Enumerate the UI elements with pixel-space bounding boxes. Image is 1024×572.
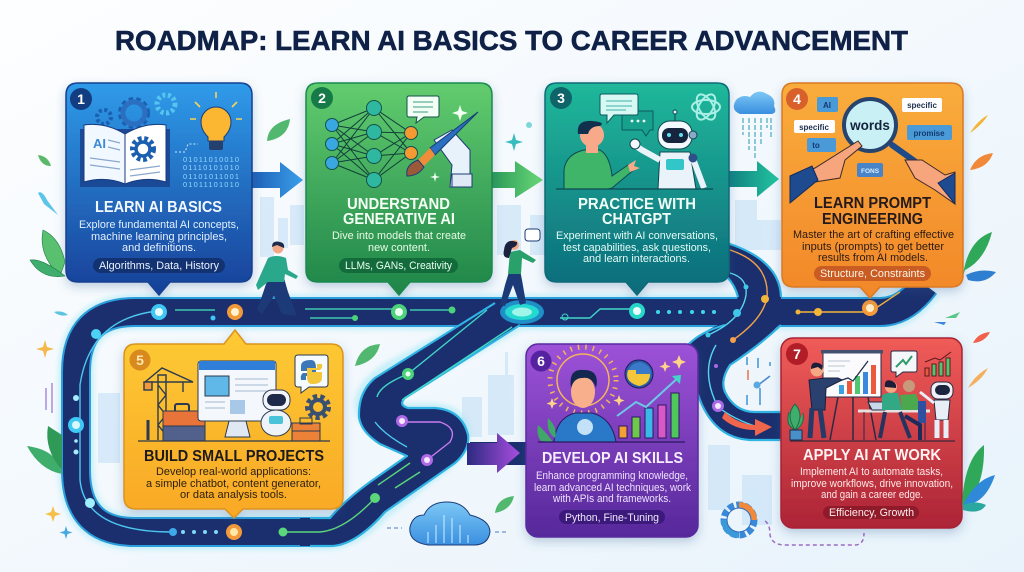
word tags: AI (823, 101, 831, 110)
icon: bottom data cloud (387, 502, 508, 545)
heading: ENGINEERING (822, 211, 923, 228)
badge 6 (530, 350, 552, 372)
icon: gear (308, 397, 328, 417)
heading: CHATGPT (602, 211, 671, 228)
arrow: step 2 to 3 (492, 161, 543, 198)
keyword pill: Python, Fine-Tuning (565, 512, 659, 524)
icon: robot hand with brush (407, 105, 478, 187)
badge 5: 5 (136, 352, 144, 368)
winding section of road (688, 243, 785, 440)
heading (814, 195, 931, 228)
icon: monitor (198, 361, 276, 437)
description: and gain a career edge. (821, 489, 923, 501)
heading: GENERATIVE AI (343, 211, 455, 228)
word tags (794, 97, 952, 177)
description (556, 230, 718, 265)
dashed connector to step 7 (765, 521, 864, 545)
description: results from AI models. (818, 252, 928, 264)
icon: light bulb (190, 92, 242, 150)
keyword pill: LLMs, GANs, Creativity (345, 260, 452, 272)
description: Explore fundamental AI concepts, (79, 219, 239, 231)
heading: UNDERSTAND (347, 196, 450, 213)
heading: DEVELOP AI SKILLS (542, 450, 683, 467)
decorative sparkles (36, 122, 532, 539)
panel: step 2 understand generative AI (306, 83, 492, 295)
red direction arrow on road (722, 412, 772, 436)
description: improve workflows, drive innovation, (791, 478, 953, 490)
binary digits: 01011010010 (183, 155, 239, 164)
icon: person (564, 121, 640, 189)
badge 4 (786, 88, 808, 110)
panel: step 7 apply AI at work (781, 338, 962, 528)
badge 2 (311, 87, 333, 109)
arrow: step 3 to 4 (729, 161, 779, 197)
title: ROADMAP: LEARN AI BASICS TO CAREER ADVANCEMENT (115, 25, 908, 56)
keyword pill: Efficiency, Growth (829, 507, 914, 519)
icon: robot (261, 390, 291, 436)
heading: BUILD SMALL PROJECTS (144, 448, 324, 465)
walking woman (500, 229, 540, 306)
description (534, 470, 691, 505)
badge 7 (786, 343, 808, 365)
description (332, 230, 466, 254)
icon: python bubble (295, 355, 328, 393)
icon: person with glowing halo (537, 347, 616, 442)
icon: team at table (858, 380, 930, 440)
description: machine learning principles, (91, 231, 227, 243)
description: or data analysis tools. (180, 489, 287, 501)
icon: mini bar chart (925, 352, 951, 376)
description: Dive into models that create (332, 230, 466, 242)
road nodes (68, 284, 878, 540)
word tags: FONS (861, 168, 880, 175)
heading (578, 196, 696, 228)
icon: python logo (625, 360, 653, 388)
icon: robot (556, 110, 713, 189)
binary digits (183, 155, 239, 189)
arrow: step 1 to 2 (252, 162, 303, 198)
icon: magnifying glass (844, 99, 920, 165)
icon: presenter (809, 363, 842, 438)
description: Enhance programming knowledge, (536, 470, 688, 482)
badge 3: 3 (557, 90, 565, 106)
heading (343, 196, 455, 228)
badge 5 (130, 350, 150, 370)
description: with APIs and frameworks. (552, 493, 671, 505)
badge 4: 4 (793, 91, 801, 107)
icon: plant (788, 404, 803, 440)
sparkles (546, 355, 686, 409)
panel: step 5 build small projects (124, 330, 343, 518)
road: winding route (76, 243, 925, 546)
keyword pill: Structure, Constraints (820, 268, 925, 280)
icon: hands (790, 141, 955, 204)
arrow: step 5 to 6 (467, 433, 520, 473)
word tags: specific (799, 123, 829, 132)
description: a simple chatbot, content generator, (146, 478, 321, 490)
description: Experiment with AI conversations, (556, 230, 718, 242)
description: Develop real-world applications: (156, 466, 311, 478)
description (791, 466, 953, 501)
binary digits: 01011101010 (183, 180, 239, 189)
decorative leaves (27, 115, 996, 513)
heading: LEARN PROMPT (814, 195, 931, 212)
road stub behind step 6 arrow (470, 442, 530, 465)
binary digits: 01101011001 (183, 172, 239, 181)
icon: circuit ornament near road (747, 357, 770, 405)
description: and definitions. (122, 242, 196, 254)
word tags: promise (913, 129, 945, 138)
icon: chat bubbles (600, 94, 653, 136)
icon: magnifying glass: words (849, 118, 890, 133)
description (79, 219, 239, 254)
badge 1: 1 (77, 91, 85, 107)
badge 2: 2 (318, 90, 326, 106)
icon: crane (144, 368, 193, 440)
icon: speech bubble (407, 96, 439, 123)
S-curve section of road (300, 303, 520, 546)
walking man (256, 242, 298, 316)
icon: growth bar chart (538, 375, 685, 442)
panel: step 4 learn prompt engineering (782, 83, 963, 298)
description (793, 229, 954, 264)
word tags: to (812, 141, 820, 150)
icon: book and gears: AI (93, 136, 106, 151)
description: new content. (368, 242, 430, 254)
icon: book and gears (80, 95, 198, 187)
icon: toolbox (163, 404, 205, 441)
keyword pill: Algorithms, Data, History (99, 260, 219, 272)
road guide lines (80, 250, 900, 532)
description: Master the art of crafting effective (793, 229, 954, 241)
icon: neural network (326, 100, 418, 188)
badge 7: 7 (793, 346, 801, 362)
heading: PRACTICE WITH (578, 196, 696, 213)
icon: robot (920, 382, 953, 438)
glowing platform under walker (500, 300, 544, 324)
badge 3 (550, 87, 572, 109)
description: Implement AI to automate tasks, (800, 466, 943, 478)
icon: presentation board (821, 350, 883, 440)
description: inputs (prompts) to get better (802, 241, 944, 253)
badge 1 (70, 88, 92, 110)
description: test capabilities, ask questions, (563, 242, 711, 254)
binary digits: 01110101010 (183, 163, 239, 172)
heading: APPLY AI AT WORK (803, 447, 941, 464)
icon: multicolour gear (724, 505, 754, 535)
description: learn advanced AI techniques, work (534, 482, 691, 494)
icon: ChatGPT knot (692, 91, 720, 123)
icon: chart bubble (891, 351, 917, 377)
skyline buildings (98, 197, 781, 525)
panel: step 1 learn AI basics (66, 83, 252, 295)
description: and learn interactions. (583, 253, 690, 265)
word tags: specific (907, 101, 937, 110)
panel: step 3 practice with ChatGPT (545, 83, 729, 295)
icon: small toolbox (292, 418, 320, 441)
heading: LEARN AI BASICS (95, 199, 222, 216)
panel: step 6 develop AI skills (526, 344, 698, 537)
badge 6: 6 (537, 353, 545, 369)
icon: rain cloud (734, 92, 775, 160)
description (146, 466, 321, 501)
